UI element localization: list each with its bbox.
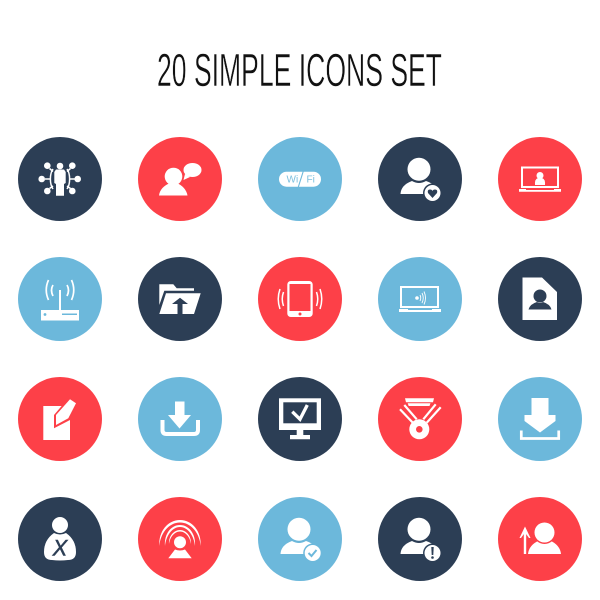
icon: download to tray	[138, 377, 222, 461]
icon: person with x: X	[52, 535, 69, 560]
icon: medal	[378, 377, 462, 461]
icon: user document	[498, 257, 582, 341]
icon: folder upload	[138, 257, 222, 341]
icon: monitor with check	[258, 377, 342, 461]
icon: network person	[18, 137, 102, 221]
icon: wireless router	[18, 257, 102, 341]
icon: user with speech bubble	[138, 137, 222, 221]
icon: laptop with user	[498, 137, 582, 221]
icon: edit note	[18, 377, 102, 461]
icon: large download	[498, 377, 582, 461]
icon: user with up arrow	[498, 497, 582, 581]
icon: person with x	[18, 497, 102, 581]
icon: vibrating phone	[258, 257, 342, 341]
middle arc	[165, 525, 195, 546]
icon: broadcasting person	[138, 497, 222, 581]
inner arc	[169, 530, 191, 544]
icon: wi-fi pill: Wi	[286, 175, 298, 186]
icon: laptop with signal	[378, 257, 462, 341]
icon: wi-fi pill: Fi	[306, 175, 315, 186]
icon: user with alert badge	[378, 497, 462, 581]
icon: user with heart badge	[378, 137, 462, 221]
outer arc	[159, 520, 201, 546]
icon: user with check badge	[258, 497, 342, 581]
icon: wi-fi pill	[258, 137, 342, 221]
